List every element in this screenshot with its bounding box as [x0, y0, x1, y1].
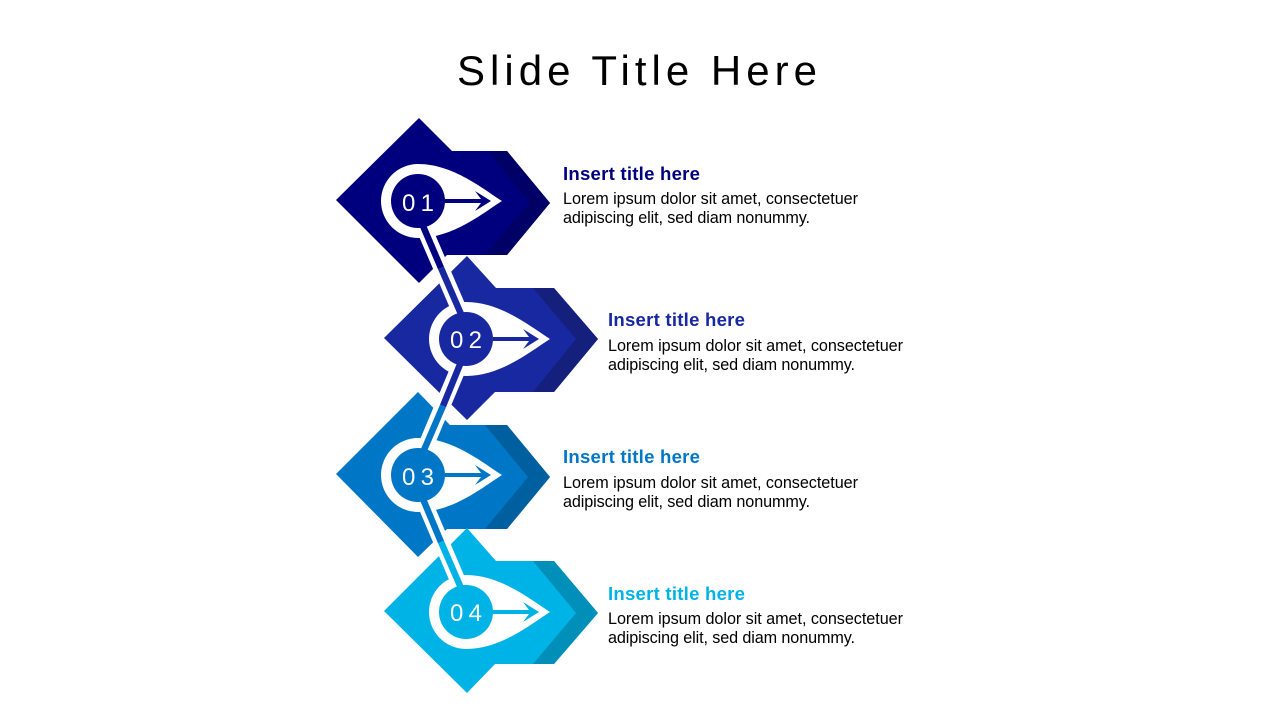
shape: step 4: [384, 528, 598, 693]
badge 1: 01: [402, 190, 434, 217]
marker: teardrop 4: [429, 575, 550, 649]
connector: 2 to 3 stripe upper: [443, 362, 461, 406]
text block 2: [608, 309, 904, 374]
text block 3: Lorem ipsum dolor sit amet, consectetuer: [563, 474, 859, 492]
shape: step 3: [336, 392, 550, 557]
text block 1: Lorem ipsum dolor sit amet, consectetuer: [563, 190, 859, 208]
shape: step 2: [384, 256, 598, 420]
badge 3: 03: [402, 464, 434, 491]
marker: teardrop 2: [429, 302, 550, 376]
badge 2: 02: [450, 327, 482, 354]
connector: 3 to 4 casing: [423, 499, 461, 588]
text block 2: Insert title here: [608, 309, 745, 330]
marker: teardrop 3: [381, 438, 502, 512]
text block 4: Insert title here: [608, 583, 745, 604]
text block 4: Lorem ipsum dolor sit amet, consectetuer: [608, 610, 904, 628]
text block 3: Insert title here: [563, 446, 700, 467]
text block 3: [563, 446, 859, 511]
shape: step 1: [336, 118, 550, 283]
connector: 2 to 3 casing: [424, 362, 461, 450]
badge 4: [439, 585, 539, 639]
connector: 3 to 4 stripe upper: [423, 499, 441, 542]
text block 1: Insert title here: [563, 163, 700, 184]
connector: 1 to 2 stripe upper: [423, 226, 441, 268]
text block 4: adipiscing elit, sed diam nonummy.: [608, 629, 855, 647]
text block 3: adipiscing elit, sed diam nonummy.: [563, 493, 810, 511]
text block 2: adipiscing elit, sed diam nonummy.: [608, 356, 855, 374]
connector: 2 to 3 stripe lower: [424, 406, 443, 450]
badge 1: [391, 174, 491, 228]
badge 4: 04: [450, 600, 482, 627]
text block 1: [563, 163, 859, 227]
text block 1: adipiscing elit, sed diam nonummy.: [563, 209, 810, 227]
text block 4: [608, 583, 904, 647]
marker: teardrop 1: [381, 164, 502, 238]
text block 2: Lorem ipsum dolor sit amet, consectetuer: [608, 337, 904, 355]
connector: 1 to 2 stripe lower: [441, 268, 461, 314]
connector: 1 to 2 casing: [423, 226, 461, 314]
badge 3: [391, 448, 491, 502]
badge 2: [439, 312, 539, 366]
title: Slide Title Here: [457, 47, 817, 94]
connector: 3 to 4 stripe lower: [441, 542, 461, 588]
